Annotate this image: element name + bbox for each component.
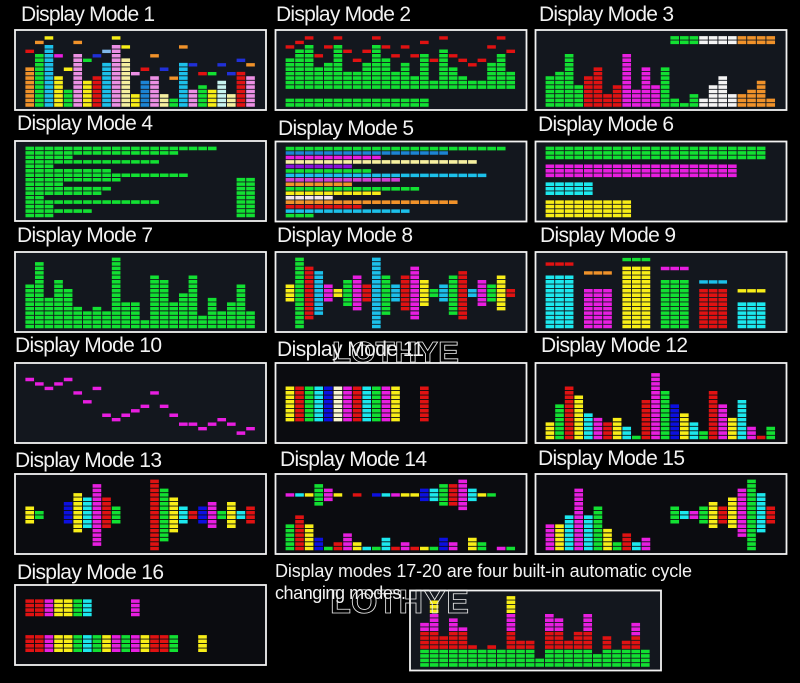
chart: mirrored waveform bars	[290, 257, 511, 328]
panel: mode 16	[15, 585, 266, 665]
frame	[15, 474, 266, 554]
panel: mode 3	[536, 30, 786, 110]
panel: mode 9	[536, 252, 786, 332]
frame	[536, 363, 786, 443]
heading: mode 10: Display Mode 10	[15, 334, 162, 357]
chart: six triple-column bars with peaks	[550, 258, 761, 328]
heading: mode 5: Display Mode 5	[278, 117, 414, 140]
chart: green bars	[30, 257, 251, 328]
frame	[276, 142, 526, 222]
chart: four horizontal blocks	[550, 146, 761, 217]
panel: mode 15	[536, 474, 786, 554]
chart: upper waveform and lower bars	[290, 479, 511, 550]
frame	[15, 252, 266, 332]
heading: mode 8: Display Mode 8	[277, 224, 413, 247]
heading: mode 12: Display Mode 12	[541, 334, 688, 357]
chart: multicolour block columns	[290, 386, 424, 421]
heading: mode 15: Display Mode 15	[538, 447, 685, 470]
chart: horizontal green bars	[26, 148, 218, 216]
chart: bars and waveform	[550, 479, 771, 550]
frame	[276, 474, 526, 554]
frame	[276, 30, 526, 110]
chart: multicolour horizontal bars	[286, 149, 507, 216]
panel: mode 8	[276, 252, 526, 332]
panel: mode 5	[276, 142, 526, 222]
chart: multicolour bars with peaks	[30, 36, 251, 107]
chart: two rows of colour blocks	[30, 598, 203, 652]
frame	[15, 585, 266, 665]
chart: multicolour bars	[550, 372, 771, 439]
chart: right green block	[241, 177, 251, 217]
heading: mode 9: Display Mode 9	[540, 224, 676, 247]
panel: mode 13	[15, 474, 266, 554]
frame	[536, 252, 786, 332]
heading: mode 7: Display Mode 7	[17, 224, 153, 247]
heading: mode 11: Display Mode 11	[277, 338, 424, 361]
frame	[15, 141, 266, 221]
panel: mode 4	[15, 141, 266, 221]
heading: mode 16: Display Mode 16	[17, 561, 164, 584]
heading: mode 13: Display Mode 13	[15, 449, 162, 472]
frame	[15, 30, 266, 110]
panel: mode 2	[276, 30, 526, 110]
panel: modes 17-20	[410, 590, 661, 670]
panel: mode 6	[536, 142, 786, 222]
chart: colour-banded bars	[550, 35, 771, 107]
frame	[410, 590, 661, 670]
panel: mode 12	[536, 363, 786, 443]
chart: stacked colour bars	[425, 595, 645, 667]
heading: mode 4: Display Mode 4	[17, 112, 153, 135]
frame	[15, 363, 266, 443]
heading: mode 6: Display Mode 6	[538, 113, 674, 136]
watermark: upper outlined brand: LOTHYE	[332, 337, 459, 369]
heading: mode 2: Display Mode 2	[276, 3, 411, 26]
panel: mode 14	[276, 474, 526, 554]
chart: magenta dot line	[30, 378, 251, 435]
heading: mode 14: Display Mode 14	[280, 448, 427, 471]
chart: mirrored waveform bars	[30, 479, 251, 550]
panel: mode 10	[15, 363, 266, 443]
panel: mode 11	[276, 363, 526, 443]
frame	[536, 474, 786, 554]
frame	[536, 142, 786, 222]
panel: mode 7	[15, 252, 266, 332]
frame	[536, 30, 786, 110]
heading: mode 3: Display Mode 3	[539, 3, 674, 26]
heading: mode 1: Display Mode 1	[21, 3, 155, 26]
frame	[276, 252, 526, 332]
frame	[276, 363, 526, 443]
text: automatic cycle note: Display modes 17-20 are four built-in automatic cycle	[275, 561, 692, 581]
chart: green bars with red peaks	[290, 36, 511, 107]
panel: mode 1	[15, 30, 266, 110]
text: automatic cycle note, second line: changing modes.	[275, 583, 406, 603]
watermark: lower outlined brand: LOTHYE	[330, 583, 469, 620]
